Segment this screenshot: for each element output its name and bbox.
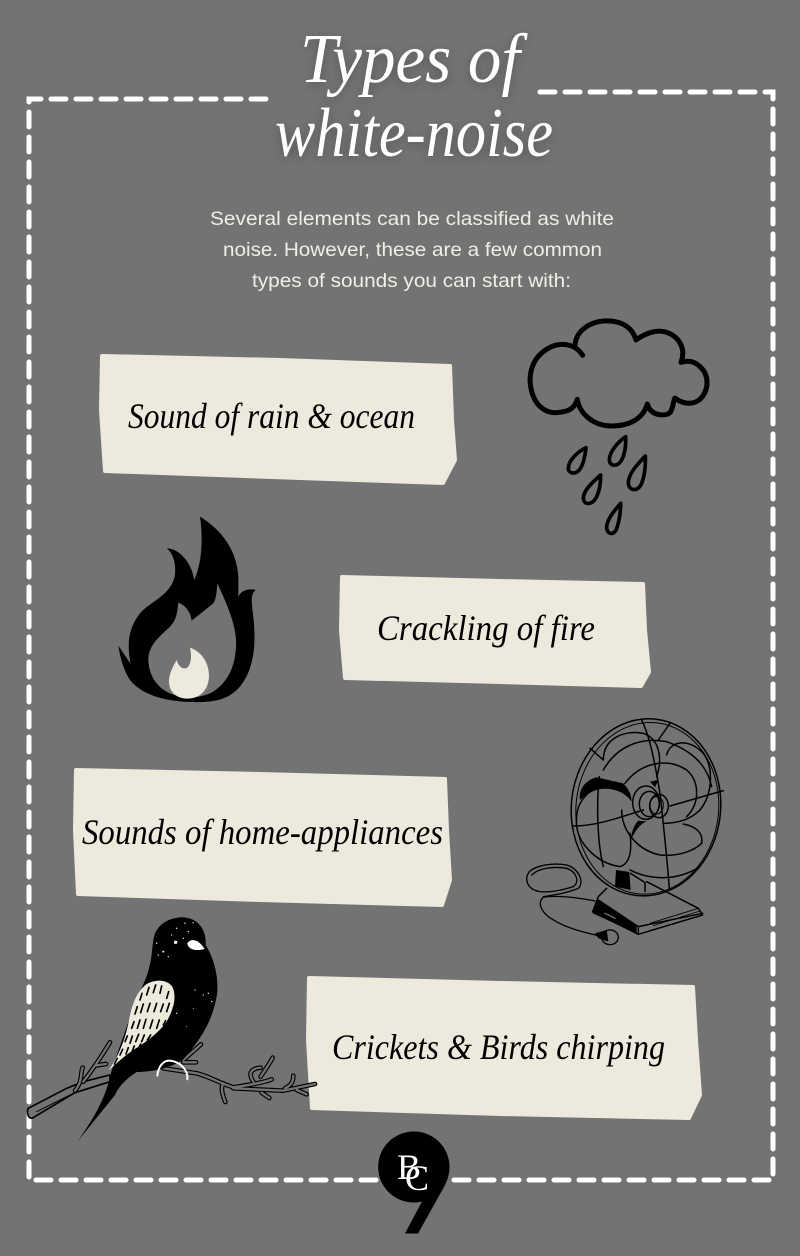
fan power cord bbox=[527, 864, 600, 936]
fan blades and motor bbox=[580, 777, 658, 840]
card: crackling of fire bbox=[341, 577, 649, 686]
card: sound of rain and ocean: Sound of rain & ocean bbox=[128, 396, 415, 436]
bird wing bbox=[108, 981, 175, 1071]
intro text bbox=[210, 208, 614, 292]
icon: electric fan bbox=[527, 711, 730, 945]
bird feet bbox=[157, 1061, 187, 1079]
card: sound of rain and ocean bbox=[101, 356, 455, 483]
title bbox=[275, 21, 553, 172]
logo: BC 9: C bbox=[405, 1158, 429, 1198]
intro text: noise. However, these are a few common bbox=[223, 239, 602, 261]
card: sounds of home-appliances: Sounds of home-appliances bbox=[82, 812, 443, 852]
wing feather marks bbox=[114, 985, 169, 1064]
icon: bird on a branch bbox=[28, 917, 315, 1142]
branch bbox=[28, 1042, 315, 1118]
icon: fire bbox=[118, 517, 256, 702]
fan cage bbox=[562, 711, 730, 903]
intro text: types of sounds you can start with: bbox=[252, 270, 571, 292]
icon: rain drops bbox=[568, 437, 645, 534]
fan neck and base bbox=[615, 870, 631, 890]
card: crackling of fire: Crackling of fire bbox=[377, 608, 595, 648]
card: sounds of home-appliances bbox=[75, 770, 450, 905]
bird eye patch bbox=[187, 940, 205, 950]
icon: rain cloud bbox=[530, 321, 707, 534]
card: crickets and birds chirping: Crickets & Birds chirping bbox=[332, 1027, 665, 1067]
logo: BC 9: B bbox=[397, 1147, 421, 1187]
logo: BC 9 bbox=[378, 1131, 450, 1234]
title: Types of bbox=[300, 21, 528, 98]
intro text: Several elements can be classified as white bbox=[210, 208, 614, 230]
feather speckles bbox=[156, 922, 212, 1027]
title: white-noise bbox=[275, 95, 553, 172]
bird body bbox=[77, 917, 217, 1142]
card: crickets and birds chirping bbox=[308, 978, 700, 1118]
